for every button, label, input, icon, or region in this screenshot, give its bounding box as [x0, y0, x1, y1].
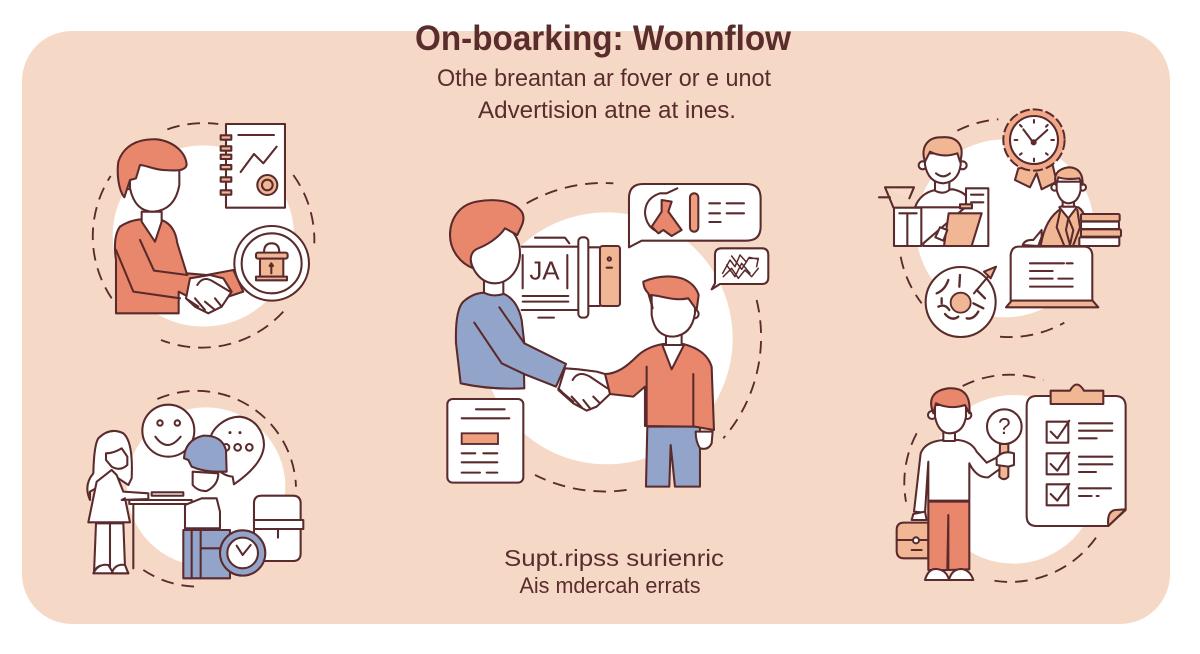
bottom caption: Supt.ripss surienric: [504, 545, 724, 571]
bottom caption: [504, 545, 724, 598]
clipboard checklist: [1027, 384, 1126, 526]
title: On-boarking: Wonnflow: [415, 19, 792, 58]
dashed ring: [901, 119, 1064, 337]
dashed ring: [93, 123, 314, 348]
clock icon: [220, 530, 265, 576]
white backdrop circle: [916, 139, 1094, 317]
person with box: [879, 137, 988, 246]
checklist row 1: [1047, 421, 1112, 443]
illustration: top right workplace: [879, 109, 1121, 337]
illustration: central handshake: [447, 183, 768, 492]
gear clock award: [1003, 109, 1065, 189]
document card: [447, 399, 523, 483]
magnifier with lock: [234, 226, 309, 301]
person with question lamp: [912, 388, 1022, 580]
seated man: [183, 436, 230, 578]
bottom caption: Ais mdercah errats: [520, 573, 700, 598]
job ad device: JA: [529, 255, 560, 285]
white backdrop circle: [127, 407, 285, 566]
smiley icon: [142, 405, 194, 457]
dashed ring: [904, 375, 1096, 582]
arm into magnifier: [207, 270, 243, 297]
checklist row 2: [1047, 453, 1112, 474]
person with question lamp: ?: [998, 413, 1011, 439]
speech bubble: [209, 417, 264, 484]
white backdrop circle: [929, 395, 1098, 564]
dashed ring: [527, 183, 761, 492]
manager with laptop and books: [1006, 167, 1121, 307]
dashed ring: [143, 391, 296, 587]
subtitle: Advertision atne at ines.: [478, 97, 736, 124]
woman at desk: [87, 431, 192, 573]
person left in blue: [450, 200, 566, 389]
handshake: [558, 368, 610, 411]
person: [115, 139, 207, 313]
chart bubble: [712, 248, 768, 289]
person right in orange: [605, 276, 714, 487]
subtitle: Othe breantan ar fover or e unot: [437, 65, 771, 92]
briefcase: [897, 523, 928, 558]
subtitle: [437, 65, 771, 124]
illustration: top left handshake and lock: [93, 123, 314, 348]
checklist row 3: [1047, 484, 1111, 505]
illustration: bottom left team chat: [87, 391, 303, 587]
notebook with chart: [221, 124, 285, 208]
white backdrop circle: [113, 145, 294, 327]
illustration: bottom right checklist: [897, 375, 1126, 582]
target dart icon: [926, 267, 996, 337]
bag icon: [254, 496, 303, 561]
white backdrop circle: [481, 212, 733, 464]
handshake: [186, 275, 232, 313]
speech bubble with profile: [629, 184, 761, 247]
job ad device: [522, 237, 620, 318]
